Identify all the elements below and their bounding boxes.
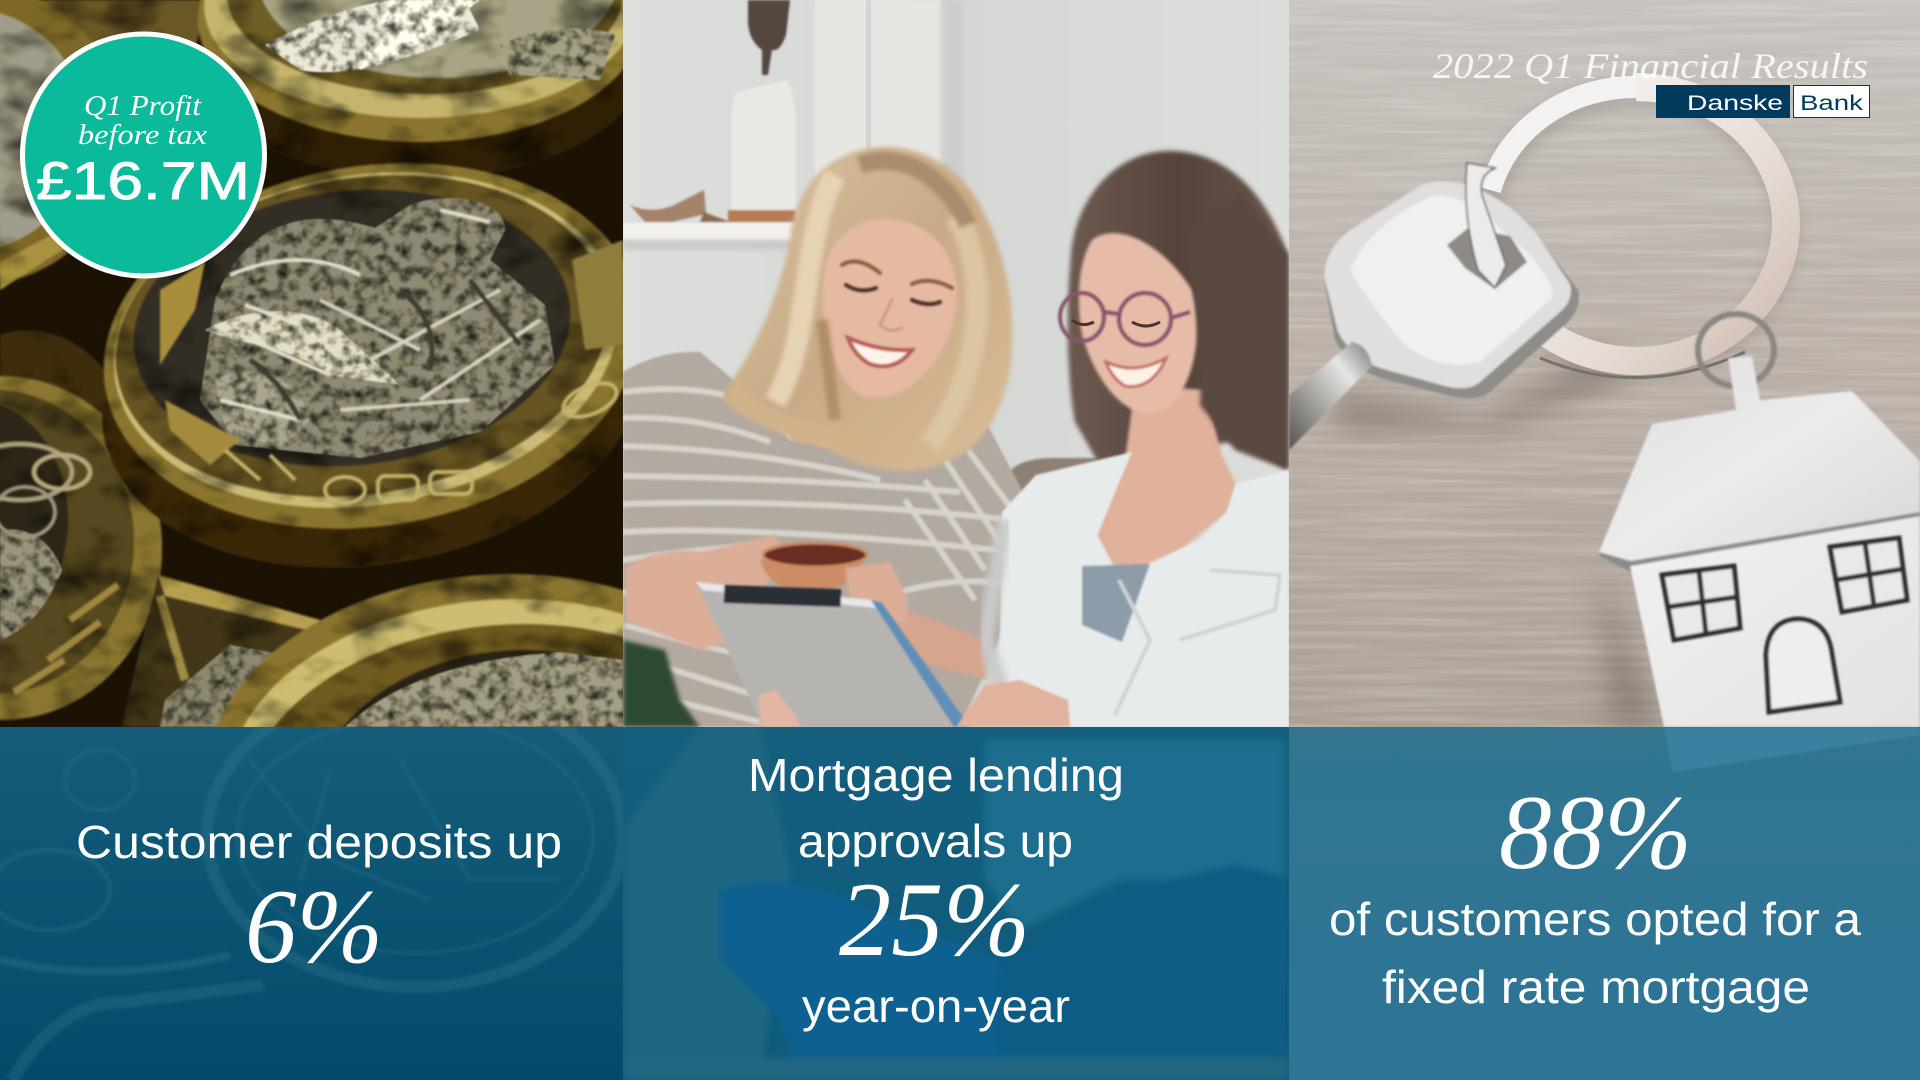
woman left: forearm and hand	[626, 535, 988, 680]
coin: small bottom centre	[122, 575, 320, 727]
woman right: hair front	[1190, 190, 1288, 470]
logo word two: Bank	[1800, 92, 1864, 115]
woman right: face	[1079, 233, 1197, 413]
key head	[1324, 163, 1579, 398]
logo word one: Danske	[1687, 92, 1783, 115]
woman left: hair back	[724, 147, 1012, 471]
small ring	[1698, 314, 1774, 386]
key shaft	[1289, 342, 1372, 450]
sofa back	[1010, 456, 1100, 492]
ghost women image	[623, 727, 1289, 1080]
ghost coin image	[0, 683, 623, 1080]
coin legend: raised oval letters	[225, 377, 621, 503]
mortgage heading line one: Mortgage lending	[748, 749, 1124, 801]
bottom coin relief	[345, 652, 623, 727]
house left window	[1662, 566, 1740, 640]
tablet	[696, 582, 970, 727]
key ring	[1486, 87, 1786, 378]
house right window	[1830, 538, 1907, 612]
panel: mortgage approvals stat	[623, 727, 1289, 1080]
woman left: hair strands	[730, 161, 977, 455]
deposits figure: 6%	[245, 868, 383, 985]
badge label line two: before tax	[78, 119, 207, 151]
panel: house keys photo	[1289, 0, 1920, 727]
woman left: face	[822, 219, 957, 398]
woman left: sweater	[623, 352, 1022, 727]
badge figure: £16.7M	[36, 152, 250, 211]
woman left: right hand on cup	[845, 562, 908, 625]
woman left: eyes, brows and smile	[842, 261, 952, 366]
title: 2022 Q1 Financial Results	[1433, 46, 1868, 86]
logo: Danske Bank	[1656, 85, 1870, 118]
fixed rate figure: 88%	[1499, 774, 1692, 891]
ghost house shadow	[1664, 727, 1920, 772]
woman right: chest and neck	[1097, 385, 1236, 577]
coin: large centre	[101, 162, 623, 568]
coin engraving: thistle and leaves	[200, 198, 555, 458]
wood background	[1289, 0, 1920, 727]
house charm body	[1630, 516, 1920, 727]
cup	[760, 543, 867, 592]
small coin relief	[160, 645, 285, 727]
soft shadows	[1330, 350, 1660, 727]
woman left: neck	[789, 434, 817, 444]
deposits heading: Customer deposits up	[76, 816, 562, 868]
woman right: shirt	[984, 452, 1288, 727]
house door	[1766, 619, 1840, 712]
wall background	[623, 0, 1289, 727]
callout: Q1 profit badge	[22, 34, 264, 276]
coin: bottom right	[216, 572, 623, 727]
top coin silver relief	[265, 0, 615, 80]
fixed rate caption line two: fixed rate mortgage	[1382, 961, 1810, 1013]
mortgage figure: 25%	[839, 861, 1030, 978]
lower left coin relief	[0, 530, 62, 640]
coin: upper left	[0, 0, 220, 290]
mortgage heading line two: approvals up	[798, 815, 1073, 867]
badge label line one: Q1 Profit	[84, 90, 202, 122]
panel: two women with tablet photo	[623, 0, 1289, 727]
woman right: glasses	[1060, 293, 1190, 345]
woman right: eyes	[1072, 320, 1160, 326]
panel: pound coins photo	[0, 0, 623, 727]
plant leaves	[623, 640, 700, 727]
woman right: smile	[1106, 358, 1166, 386]
shelf with vase	[623, 0, 801, 250]
coin: top right	[194, 0, 646, 178]
hands at bottom	[759, 680, 1070, 727]
fixed rate caption line one: of customers opted for a	[1329, 893, 1861, 945]
house charm roof	[1599, 356, 1920, 572]
panel: deposits stat	[0, 683, 623, 1080]
coin: lower left	[0, 331, 162, 720]
mortgage timeframe: year-on-year	[802, 980, 1070, 1032]
panel: fixed rate stat	[1289, 727, 1920, 1080]
woman right: hair	[1068, 151, 1288, 470]
